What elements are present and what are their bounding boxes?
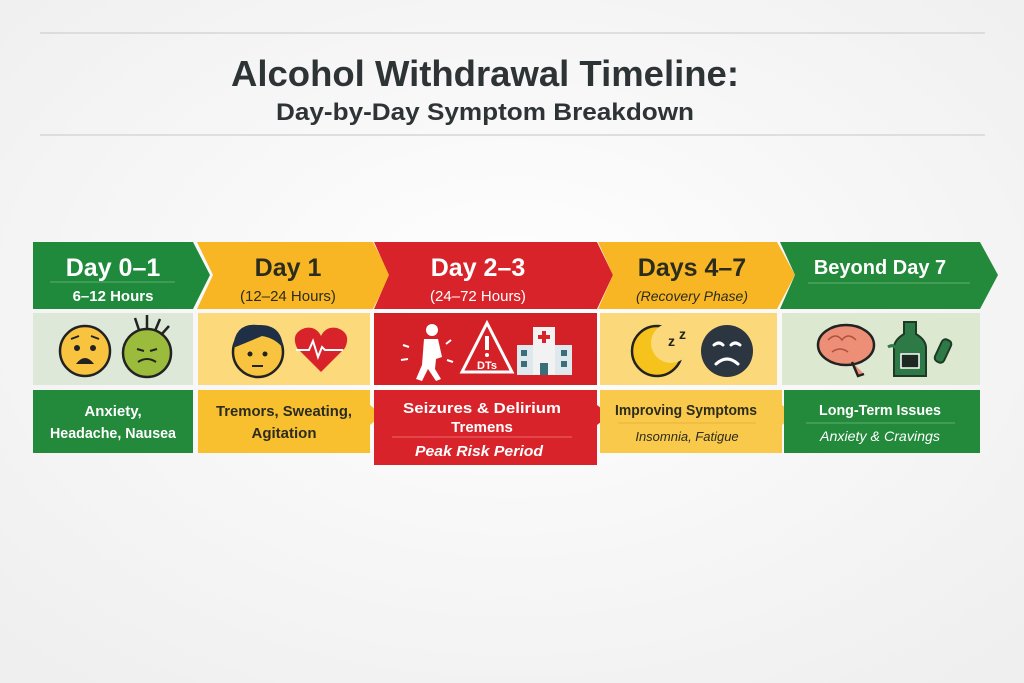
header: Day 2-3: (24–72 Hours): [430, 288, 526, 305]
header: Days 4-7: [598, 242, 795, 309]
header: Day 0-1: 6–12 Hours: [73, 288, 153, 305]
header: Day 0-1: [33, 242, 210, 309]
panel: Day 2-3: [374, 242, 613, 465]
text: Anxiety, Headache, Nausea: Anxiety,: [84, 403, 142, 420]
text: Anxiety, Headache, Nausea: [33, 390, 193, 453]
text: Tremors, Sweating, Agitation: Tremors, Sweating,: [216, 403, 352, 420]
text: Improving Symptoms, Insomnia, Fatigue: Insomnia, Fatigue: [635, 429, 739, 444]
header: Day 2-3: Day 2–3: [431, 254, 525, 282]
text: Tremors, Sweating, Agitation: [198, 390, 382, 453]
text: Tremors, Sweating, Agitation: Agitation: [252, 425, 316, 442]
text: Long-Term Issues, Anxiety & Cravings: [784, 390, 980, 453]
text: Seizures & Delirium Tremens, Peak Risk Period: [374, 390, 610, 465]
text: Seizures & Delirium Tremens, Peak Risk Period: Tremens: [451, 419, 513, 436]
title: [231, 53, 739, 126]
header: Day 2-3: [374, 242, 613, 309]
header: Beyond Day 7: [780, 242, 998, 309]
icons: moon and sad face: z: [679, 326, 686, 342]
panel: Days 4-7: [598, 242, 795, 453]
text: Long-Term Issues, Anxiety & Cravings: Anxiety & Cravings: [819, 428, 940, 444]
header: Day 1: [197, 242, 390, 309]
header: Days 4-7: Days 4–7: [638, 254, 746, 282]
text: Long-Term Issues, Anxiety & Cravings: Long-Term Issues: [819, 402, 941, 419]
header: Days 4-7: (Recovery Phase): [636, 288, 748, 304]
subtitle: Day-by-Day Symptom Breakdown: [276, 99, 694, 126]
icons: seizure, DTs warning, hospital: DTs: [477, 360, 497, 372]
icons: sweating face and heart: [198, 313, 370, 385]
text: Improving Symptoms, Insomnia, Fatigue: Improving Symptoms: [615, 402, 757, 419]
icons: brain, bottle, can: [782, 313, 980, 385]
header: Day 1: (12–24 Hours): [240, 288, 336, 305]
text: Seizures & Delirium Tremens, Peak Risk Period: Seizures & Delirium: [403, 400, 561, 417]
icons: anxious and nauseous faces: [33, 313, 193, 385]
text: Anxiety, Headache, Nausea: Headache, Nausea: [50, 425, 177, 442]
icons: moon and sad face: z: [668, 333, 675, 349]
title: Alcohol Withdrawal Timeline:: [231, 53, 739, 94]
header: Day 0-1: Day 0–1: [66, 254, 160, 282]
icons: seizure, DTs warning, hospital: [374, 313, 597, 385]
text: Seizures & Delirium Tremens, Peak Risk Period: Peak Risk Period: [415, 443, 544, 460]
panel: Beyond Day 7: [780, 242, 998, 453]
panel: Day 1: [197, 242, 390, 453]
header: Day 1: Day 1: [255, 254, 321, 282]
icons: moon and sad face: [600, 313, 777, 385]
header: Beyond Day 7: Beyond Day 7: [814, 257, 946, 279]
panel: Day 0-1: [33, 242, 210, 453]
text: Improving Symptoms, Insomnia, Fatigue: [600, 390, 795, 453]
